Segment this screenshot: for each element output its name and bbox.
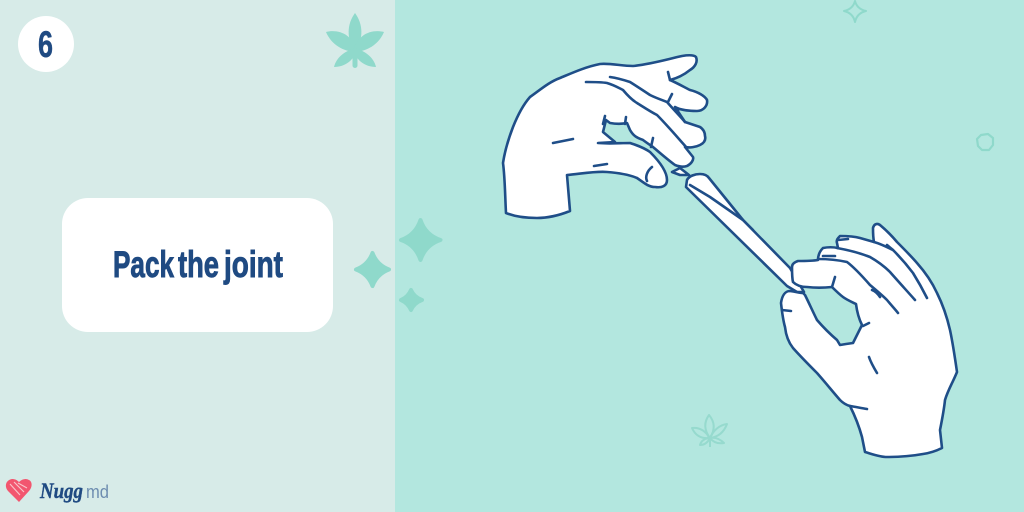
step number badge: 6 [38, 24, 53, 65]
illustration: upper hand [503, 55, 707, 218]
icon: sparkle large [401, 220, 440, 260]
icon: hexagon outline [977, 134, 993, 150]
icon: sparkle outline top right [844, 1, 866, 22]
heading: the [178, 244, 219, 285]
panel: left background [0, 0, 395, 512]
heading: Pack [113, 244, 174, 285]
panel: right background [395, 0, 1024, 512]
logo: Nuggmd: md [86, 482, 109, 502]
heading [113, 244, 283, 285]
illustration: lower hand [781, 224, 957, 457]
icon: sparkle small [401, 290, 422, 310]
step number badge [18, 16, 74, 72]
text card [62, 198, 333, 332]
heading: joint [223, 244, 283, 285]
logo: Nuggmd: Nugg [39, 478, 83, 503]
illustration: joint [672, 168, 804, 292]
icon: cannabis leaf outline bottom [692, 415, 727, 447]
icon: sparkle middle [356, 253, 389, 286]
icon: cannabis leaf top [326, 13, 384, 68]
logo: Nuggmd [6, 478, 109, 503]
